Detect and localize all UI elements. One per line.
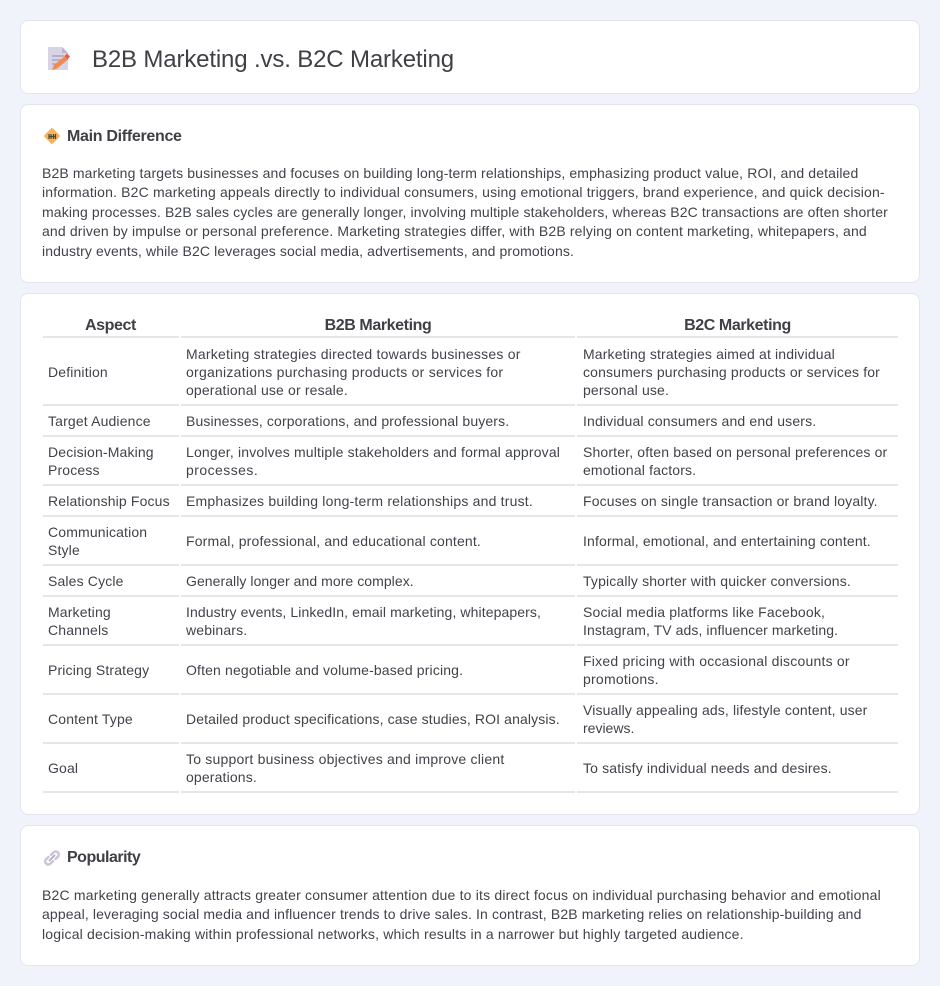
table rows: Detailed product specifications, case studies, ROI analysis. — [186, 711, 560, 727]
table rows: webinars. — [186, 622, 247, 638]
table rows: reviews. — [583, 720, 634, 736]
table rows: Pricing Strategy — [48, 662, 149, 678]
table header: B2B Marketing — [325, 317, 431, 334]
table rows: Individual consumers and end users. — [583, 413, 816, 429]
text: main difference: and driven by impulse or personal preference. Marketing strategies differ, with B2B relying on content marketing, whitepapers, and — [42, 223, 867, 239]
heading: main difference: Main Difference — [67, 128, 182, 145]
table rows: Emphasizes building long-term relationships and trust. — [186, 493, 533, 509]
table rows: consumers purchasing products or services for — [583, 364, 880, 380]
text: popularity: appeal, leveraging social media and influencer trends to drive sales. In contrast, B2B marketing relies on relationship-building and — [42, 906, 862, 922]
table rows: operations. — [186, 769, 257, 785]
table rows: Goal — [48, 760, 78, 776]
icon: diamond sign — [44, 128, 60, 144]
text: main difference: information. B2C marketing appeals directly to individual consumers, using emotional triggers, brand experience, and quick decision- — [42, 184, 885, 200]
text: popularity — [42, 887, 881, 942]
table rows: personal use. — [583, 382, 669, 398]
text: main difference: industry events, while B2C leverages social media, advertisements, and promotions. — [42, 243, 574, 259]
icon: chain link — [44, 850, 60, 866]
table rows: Marketing — [48, 604, 111, 620]
table rows: To support business objectives and improve client — [186, 751, 504, 767]
table rows: Generally longer and more complex. — [186, 573, 414, 589]
text: popularity: logical decision-making within professional networks, which results in a narrower but highly targeted audience. — [42, 926, 744, 942]
table rows: Marketing strategies aimed at individual — [583, 346, 835, 362]
table rows: Sales Cycle — [48, 573, 124, 589]
table rows: Formal, professional, and educational content. — [186, 533, 481, 549]
table rows: Instagram, TV ads, influencer marketing. — [583, 622, 838, 638]
table rows: promotions. — [583, 671, 659, 687]
table rows: Visually appealing ads, lifestyle content, user — [583, 702, 867, 718]
panel: title — [20, 20, 920, 94]
table rows: Channels — [48, 622, 108, 638]
table rows: Businesses, corporations, and professional buyers. — [186, 413, 509, 429]
table rows: Longer, involves multiple stakeholders and formal approval — [186, 444, 560, 460]
title: B2B Marketing .vs. B2C Marketing — [92, 46, 454, 73]
icon: document with pencil — [48, 47, 70, 70]
table rows: organizations purchasing products or services for — [186, 364, 503, 380]
text: main difference: making processes. B2B sales cycles are generally longer, involving multiple stakeholders, whereas B2C transactions are often shorter — [42, 204, 888, 220]
table rows: To satisfy individual needs and desires. — [583, 760, 832, 776]
panel: popularity — [20, 825, 920, 966]
table rows: Shorter, often based on personal preferences or — [583, 444, 887, 460]
table rows: Social media platforms like Facebook, — [583, 604, 825, 620]
table rows: Fixed pricing with occasional discounts or — [583, 653, 850, 669]
table rows: Definition — [48, 364, 108, 380]
table rows: Marketing strategies directed towards businesses or — [186, 346, 521, 362]
table rows: emotional factors. — [583, 462, 696, 478]
table rows: Industry events, LinkedIn, email marketing, whitepapers, — [186, 604, 541, 620]
table rows: Style — [48, 542, 80, 558]
table header — [85, 317, 791, 334]
panel: comparison table — [20, 293, 920, 815]
table header: B2C Marketing — [684, 317, 791, 334]
table rows: Content Type — [48, 711, 133, 727]
table rows: Communication — [48, 524, 147, 540]
table rows: processes. — [186, 462, 258, 478]
panel: main difference — [20, 104, 920, 283]
text: main difference: B2B marketing targets businesses and focuses on building long-term relationships, emphasizing product value, ROI, and detailed — [42, 165, 858, 181]
table rows: Often negotiable and volume-based pricing. — [186, 662, 463, 678]
table rows: Informal, emotional, and entertaining content. — [583, 533, 871, 549]
table rows: operational use or resale. — [186, 382, 348, 398]
table rows: Relationship Focus — [48, 493, 170, 509]
heading: popularity: Popularity — [67, 849, 140, 866]
table header: Aspect — [85, 317, 136, 334]
table rows: Typically shorter with quicker conversions. — [583, 573, 851, 589]
table rows: Focuses on single transaction or brand loyalty. — [583, 493, 878, 509]
table rows: Target Audience — [48, 413, 151, 429]
text: main difference — [42, 165, 888, 259]
text: popularity: B2C marketing generally attracts greater consumer attention due to its direct focus on individual purchasing behavior and emotional — [42, 887, 881, 903]
table rows: Process — [48, 462, 100, 478]
table rows: Decision-Making — [48, 444, 154, 460]
